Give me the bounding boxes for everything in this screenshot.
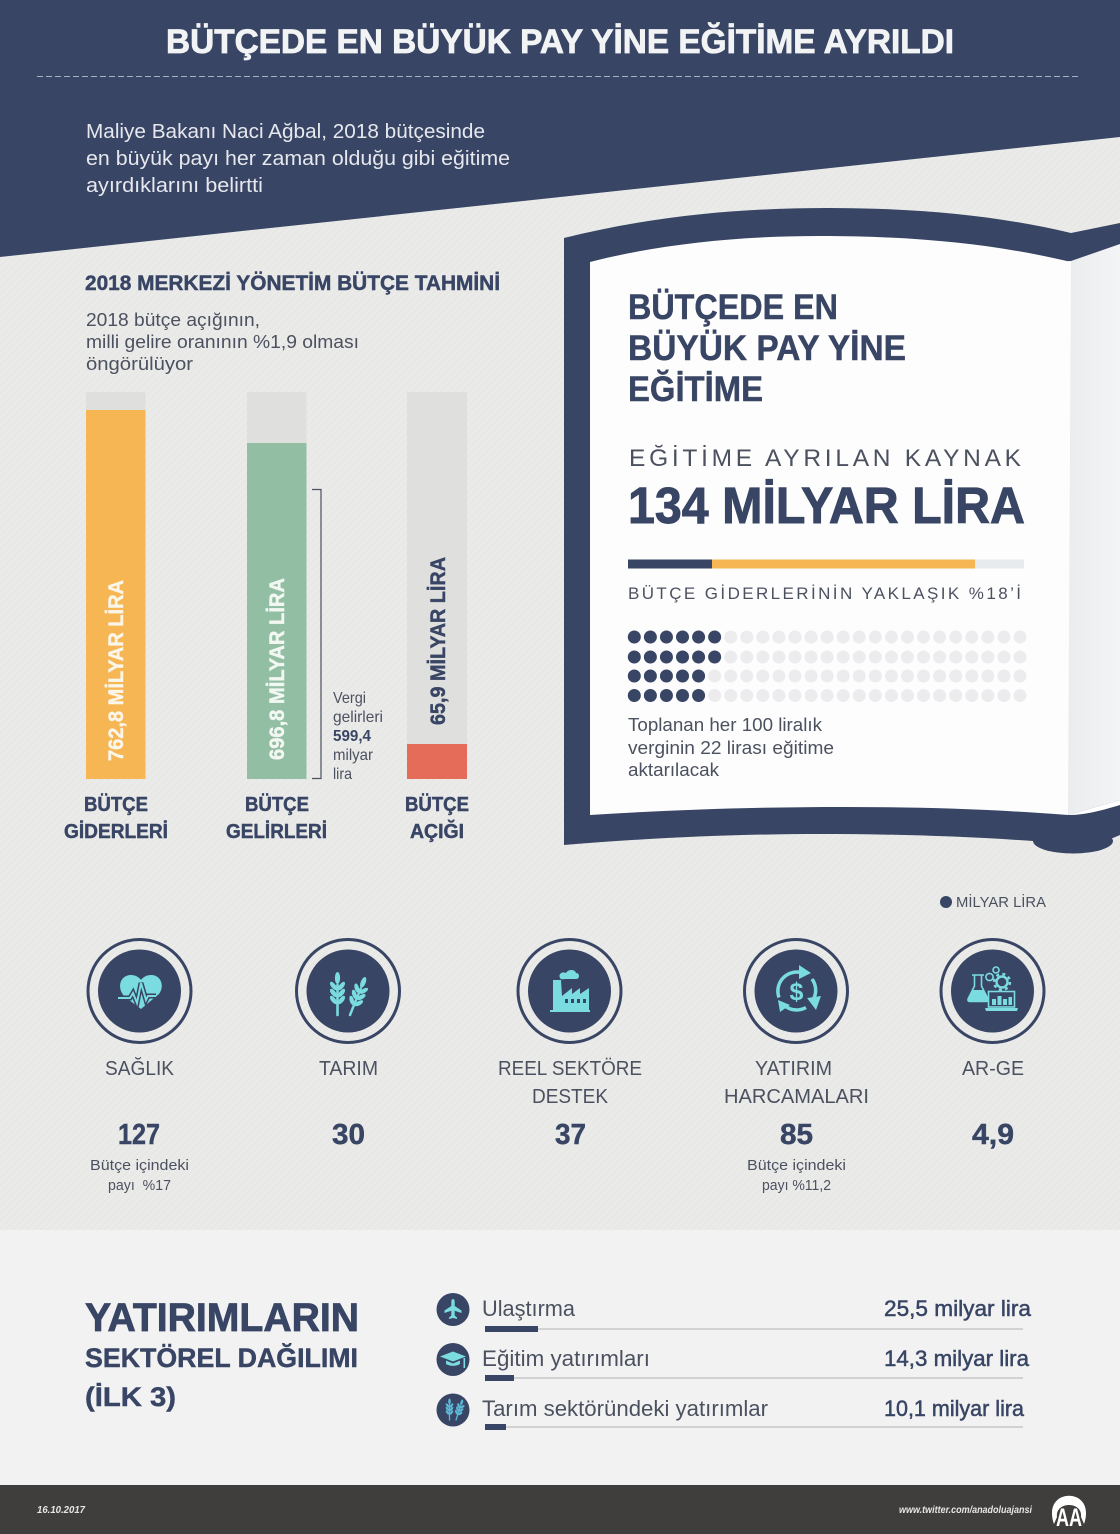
row: education: Eğitim yatırımları	[482, 1346, 650, 1371]
row: transport: Ulaştırma	[482, 1296, 576, 1321]
source link: www.twitter.com/anadoluajansi	[899, 1505, 1032, 1516]
budget share notes: Bütçe içindeki	[90, 1157, 189, 1174]
tax revenue note: milyar	[333, 747, 374, 764]
investments heading	[85, 1296, 359, 1412]
panel: sector investments	[0, 1230, 1120, 1485]
category labels: SAĞLIK	[105, 1057, 175, 1080]
section heading: 2018 MERKEZİ YÖNETİM BÜTÇE TAHMİNİ	[85, 272, 500, 295]
bar labels: BÜTÇE	[84, 793, 148, 816]
icon: health	[88, 940, 191, 1042]
tax revenue note: lira	[333, 766, 352, 783]
logo: AA	[1056, 1504, 1082, 1532]
category values: 127	[118, 1119, 160, 1151]
book cover	[564, 208, 1120, 854]
book heading: EĞİTİME	[628, 369, 763, 409]
tax revenue note	[333, 690, 383, 783]
row: agriculture	[436, 1394, 1025, 1430]
investments heading: SEKTÖREL DAĞILIMI	[85, 1342, 358, 1373]
category values: 37	[555, 1119, 586, 1151]
book heading	[628, 288, 906, 409]
category values: 4,9	[972, 1119, 1014, 1151]
bar: budget deficit: 65,9 MİLYAR LİRA	[427, 557, 450, 725]
row: education: 14,3 milyar lira	[884, 1346, 1030, 1371]
row: agriculture: 10,1 milyar lira	[884, 1396, 1025, 1421]
budget share notes	[90, 1157, 846, 1194]
bracket: tax revenues	[312, 490, 321, 778]
category labels: DESTEK	[532, 1086, 609, 1108]
education resource label: EĞİTİME AYRILAN KAYNAK	[629, 445, 1022, 472]
intro text: ayırdıklarını belirtti	[86, 175, 263, 197]
panel: open book	[564, 208, 1120, 854]
tax revenue note: Vergi	[333, 690, 366, 707]
row: transport	[436, 1293, 1032, 1332]
right page edge	[1068, 244, 1120, 815]
category labels: REEL SEKTÖRE	[498, 1058, 642, 1080]
tax note	[628, 714, 834, 780]
logo	[1052, 1496, 1086, 1532]
investments heading: YATIRIMLARIN	[85, 1296, 359, 1340]
icon: investment: $	[790, 978, 804, 1006]
bar labels: GELİRLERİ	[226, 820, 327, 843]
icon: agriculture	[296, 940, 400, 1042]
intro text: Maliye Bakanı Naci Ağbal, 2018 bütçesinde	[86, 121, 485, 143]
budget share notes: payı %17	[108, 1177, 171, 1194]
budget share notes: Bütçe içindeki	[747, 1157, 846, 1174]
section subtitle: 2018 bütçe açığının,	[86, 309, 260, 330]
panel: budget forecast	[64, 272, 500, 843]
book heading: BÜTÇEDE EN	[628, 288, 838, 327]
bar labels: AÇIĞI	[410, 819, 464, 843]
category labels: YATIRIM	[755, 1058, 832, 1080]
bar: budget expenses	[86, 392, 146, 779]
category labels: TARIM	[319, 1058, 378, 1080]
education resource value: 134 MİLYAR LİRA	[628, 477, 1025, 534]
bar: budget revenues	[247, 392, 306, 779]
investments heading: (İLK 3)	[85, 1382, 176, 1412]
category labels: AR-GE	[962, 1058, 1024, 1080]
header band	[0, 0, 1120, 257]
tax revenue note: gelirleri	[333, 709, 383, 726]
bar: budget deficit	[407, 392, 467, 779]
title: BÜTÇEDE EN BÜYÜK PAY YİNE EĞİTİME AYRILDI	[166, 23, 954, 61]
budget share notes: payı %11,2	[762, 1177, 831, 1194]
intro text: en büyük payı her zaman olduğu gibi eğitime	[86, 148, 510, 170]
category labels: HARCAMALARI	[724, 1086, 869, 1108]
white page	[590, 236, 1071, 815]
bar labels: BÜTÇE	[405, 793, 469, 816]
row: education	[436, 1343, 1030, 1381]
intro text	[86, 121, 510, 197]
category values: 85	[780, 1119, 813, 1151]
share of expenses: BÜTÇE GİDERLERİNİN YAKLAŞIK %18’İ	[628, 584, 1021, 603]
icon: industry	[518, 940, 621, 1042]
tax revenue note: 599,4	[333, 728, 371, 745]
dot matrix	[634, 637, 1026, 696]
progress bar	[628, 560, 1024, 568]
section subtitle	[86, 309, 359, 374]
footer	[0, 1485, 1120, 1534]
icon: R&D	[941, 940, 1044, 1042]
bar: budget revenues: 696,8 MİLYAR LİRA	[266, 578, 289, 760]
date: 16.10.2017	[37, 1505, 85, 1516]
legend: MİLYAR LİRA	[956, 893, 1046, 911]
bar labels	[64, 793, 469, 843]
row: transport: 25,5 milyar lira	[884, 1296, 1032, 1321]
section subtitle: milli gelire oranının %1,9 olması	[86, 331, 359, 352]
panel: spending categories	[88, 940, 1044, 1194]
tax note: Toplanan her 100 liralık	[628, 714, 823, 735]
category values: 30	[332, 1119, 365, 1151]
row: agriculture: Tarım sektöründeki yatırımlar	[482, 1396, 768, 1421]
bar labels: GİDERLERİ	[64, 820, 168, 843]
icon: investment	[744, 940, 848, 1042]
category labels	[105, 1057, 1024, 1108]
bar: budget expenses: 762,8 MİLYAR LİRA	[105, 580, 128, 761]
book heading: BÜYÜK PAY YİNE	[628, 329, 906, 368]
section subtitle: öngörülüyor	[86, 353, 193, 374]
tax note: verginin 22 lirası eğitime	[628, 737, 834, 758]
tax note: aktarılacak	[628, 759, 720, 780]
category values	[118, 1119, 1014, 1151]
bar labels: BÜTÇE	[245, 793, 309, 816]
